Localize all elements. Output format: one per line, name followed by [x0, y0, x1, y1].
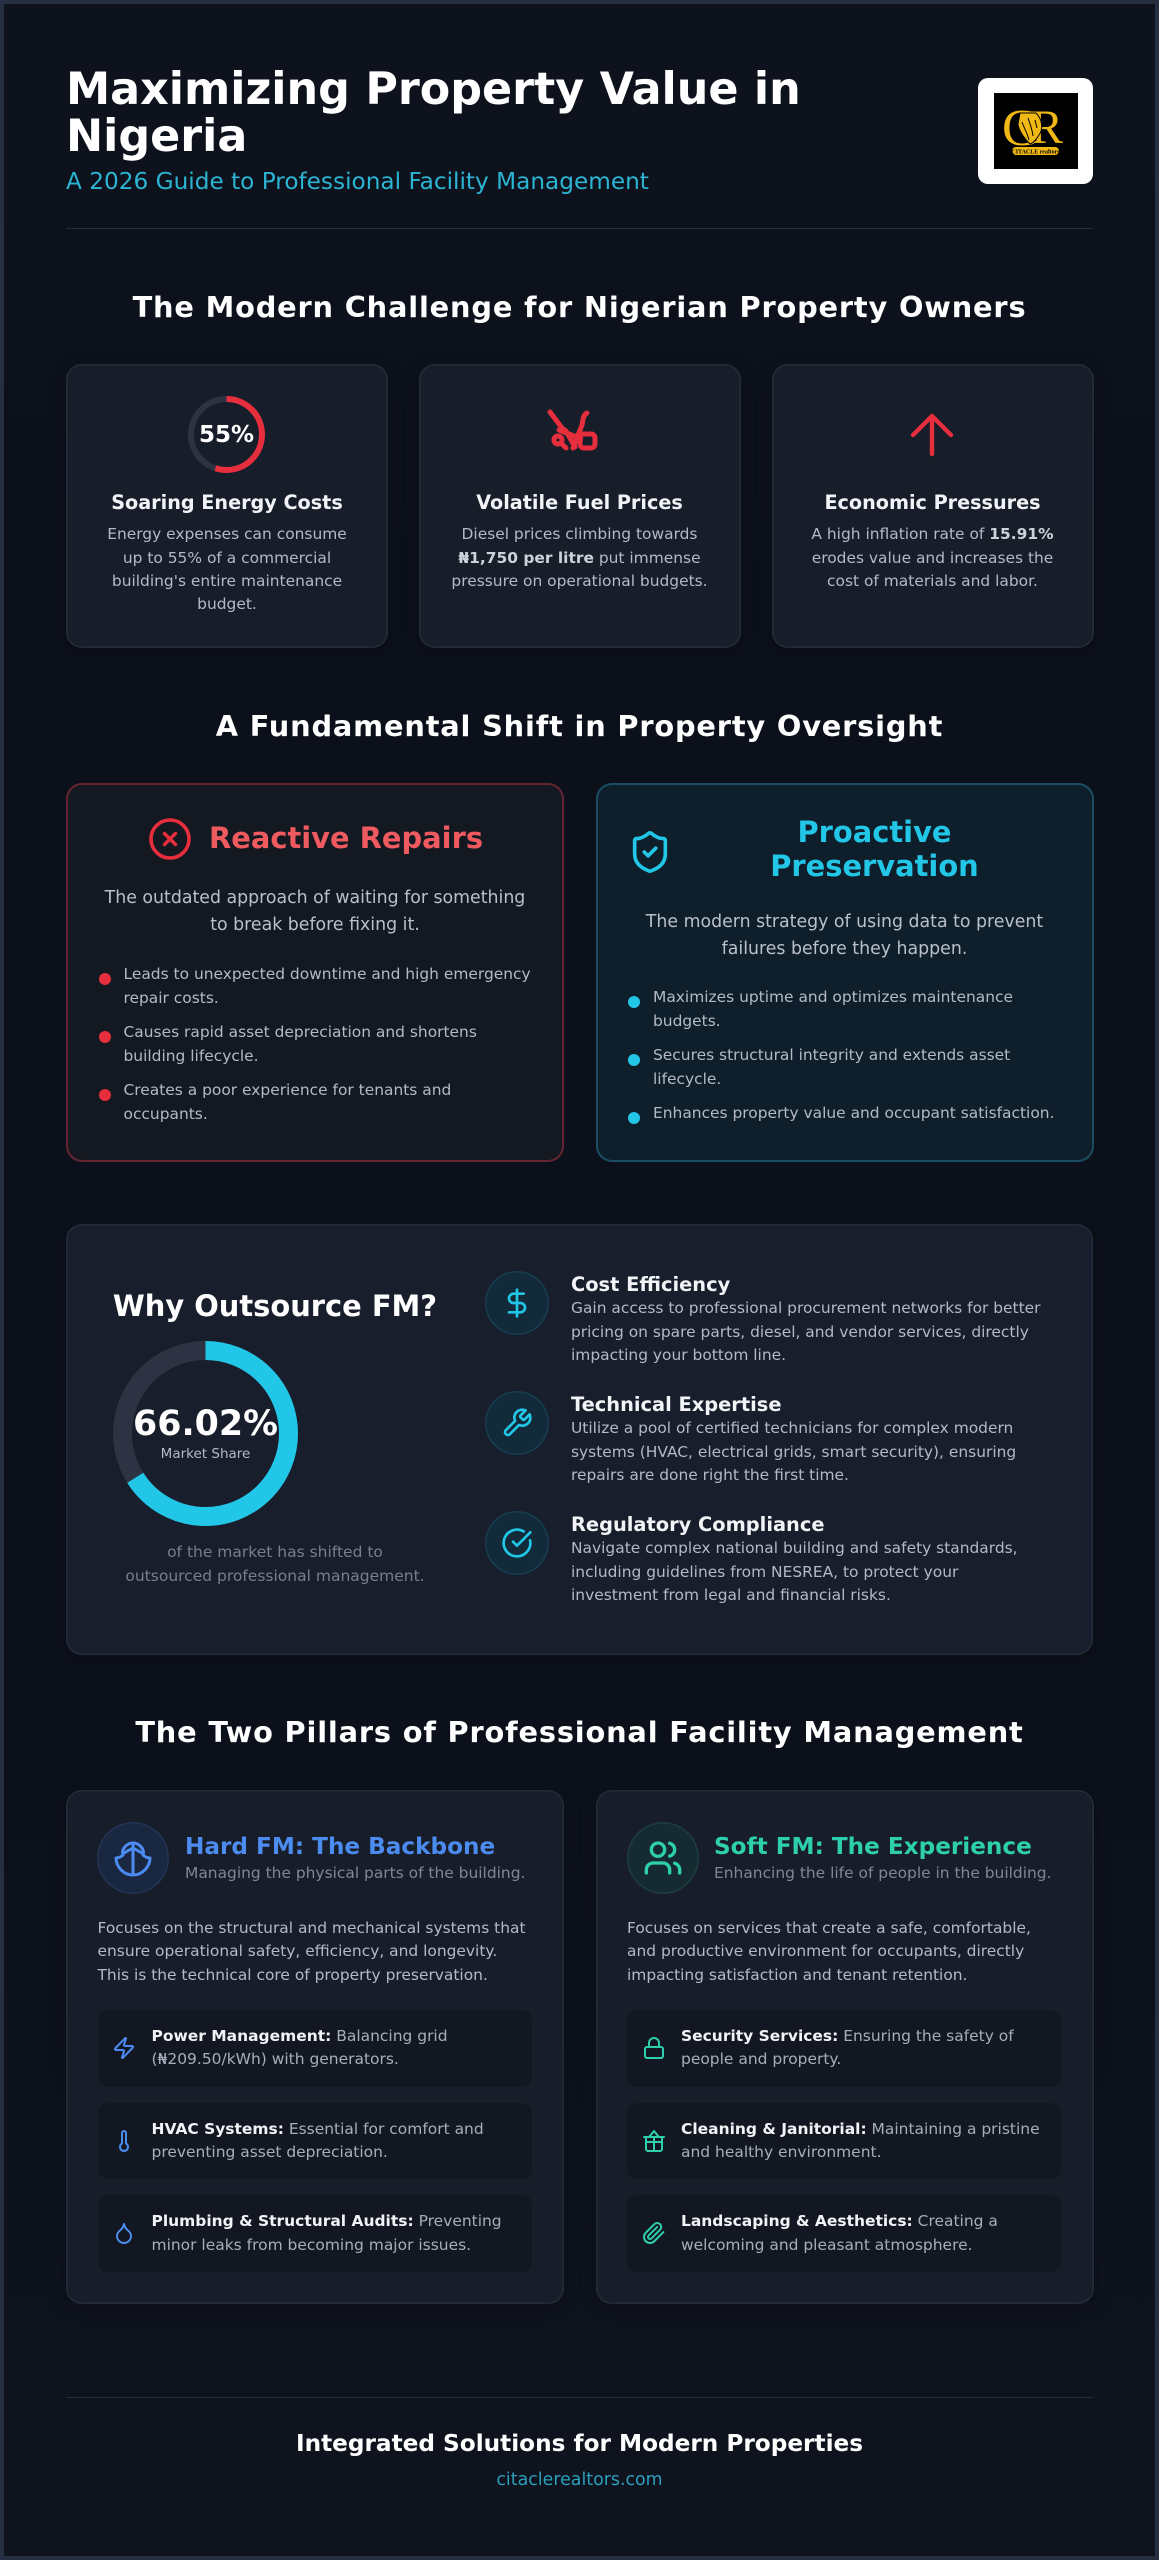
pillar text: impacting satisfaction and tenant retention.	[627, 1966, 967, 1984]
footer title: Integrated Solutions for Modern Properties	[296, 2430, 863, 2457]
pillar text	[97, 1919, 526, 1984]
chart: 66.02% donut	[113, 1341, 298, 1526]
card text	[811, 525, 1054, 590]
bullet list: Causes rapid asset depreciation and shortens	[124, 1023, 477, 1041]
donut caption: of the market has shifted to	[167, 1543, 383, 1561]
icon: shield check	[632, 831, 668, 873]
card text: cost of materials and labor.	[827, 572, 1038, 590]
pillar text: Focuses on services that create a safe, comfortable,	[627, 1919, 1031, 1937]
heading: fundamental shift: A Fundamental Shift in Property Oversight	[216, 709, 943, 743]
pillar text: This is the technical core of property preservation.	[98, 1966, 488, 1984]
card text: Diesel prices climbing towards	[462, 525, 697, 543]
pillar subtitle: Managing the physical parts of the building.	[185, 1864, 525, 1882]
panel: hard fm	[66, 1790, 564, 2304]
feature: technical expertise	[485, 1391, 1016, 1484]
item: landscaping and aesthetics: welcoming and pleasant atmosphere.	[681, 2236, 973, 2254]
footer divider	[66, 2397, 1093, 2398]
panel title: Why Outsource FM?	[113, 1289, 437, 1323]
panel: proactive preservation	[596, 783, 1094, 1162]
icon: x circle	[149, 818, 191, 860]
card title: Economic Pressures	[824, 491, 1041, 514]
icon: droplet	[116, 2223, 132, 2244]
feature: regulatory compliance: Regulatory Compliance	[571, 1513, 825, 1536]
card text: Energy expenses can consume	[107, 525, 347, 543]
item: plumbing and structural audits: Plumbing & Structural Audits: Preventing	[152, 2212, 502, 2230]
item: power management	[98, 2010, 532, 2086]
feature: technical expertise: Utilize a pool of certified technicians for complex modern	[571, 1419, 1013, 1437]
item: cleaning and janitorial	[627, 2103, 1061, 2179]
bullet list: budgets.	[653, 1012, 721, 1030]
card text: budget.	[197, 595, 257, 613]
icon: wrench	[485, 1391, 549, 1455]
bullet list: Leads to unexpected downtime and high emergency	[124, 965, 531, 983]
bullet list: lifecycle.	[653, 1070, 721, 1088]
feature: regulatory compliance: investment from legal and financial risks.	[571, 1586, 891, 1604]
card title: Soaring Energy Costs	[111, 491, 343, 514]
bullet list	[99, 965, 531, 1123]
panel intro: to break before fixing it.	[210, 915, 420, 935]
card text: ₦1,750 per litre put immense	[458, 549, 701, 567]
feature: cost efficiency: Gain access to professional procurement networks for better	[571, 1299, 1041, 1317]
item: security services	[627, 2010, 1061, 2086]
item: security services: people and property.	[681, 2050, 841, 2068]
pillar text: ensure operational safety, efficiency, and longevity.	[98, 1942, 497, 1960]
bullet list	[628, 988, 1054, 1124]
card text: pressure on operational budgets.	[451, 572, 708, 590]
icon: check circle	[485, 1511, 549, 1575]
panel: why outsource fm	[66, 1224, 1093, 1655]
feature: regulatory compliance: Navigate complex national building and safety standards,	[571, 1539, 1018, 1557]
icon: up arrow	[910, 414, 954, 456]
icon: fuel	[548, 410, 598, 450]
icon: hard fm circle	[97, 1822, 169, 1894]
item: hvac systems: HVAC Systems: Essential for comfort and	[152, 2120, 484, 2138]
bullet list: building lifecycle.	[124, 1047, 259, 1065]
icon: paperclip	[643, 2222, 664, 2244]
logo: CITACLE realtors	[1011, 150, 1060, 156]
panel intro	[104, 888, 525, 935]
bullet list: repair costs.	[124, 989, 219, 1007]
feature: regulatory compliance	[485, 1511, 1018, 1604]
panel title	[770, 815, 979, 883]
feature: cost efficiency: impacting your bottom line.	[571, 1346, 786, 1364]
item: cleaning and janitorial: and healthy environment.	[681, 2143, 882, 2161]
card title: Volatile Fuel Prices	[476, 491, 683, 514]
panel: economic pressures	[772, 364, 1094, 648]
icon: thermometer	[119, 2130, 129, 2152]
logo: C	[1002, 100, 1037, 157]
card text: up to 55% of a commercial	[123, 549, 331, 567]
bullet list: Secures structural integrity and extends asset	[653, 1046, 1010, 1064]
header divider	[66, 228, 1093, 229]
feature: regulatory compliance: including guidelines from NESREA, to protect your	[571, 1563, 958, 1581]
chart: 66.02% donut: 66.02%	[133, 1404, 278, 1444]
header title: Maximizing Property Value in	[66, 64, 801, 115]
icon: lightning	[114, 2037, 134, 2059]
logo: R	[1031, 101, 1063, 154]
panel title: Preservation	[770, 849, 979, 883]
item: plumbing and structural audits	[98, 2195, 532, 2272]
bullet list: Enhances property value and occupant satisfaction.	[653, 1104, 1054, 1122]
header title	[66, 64, 801, 162]
card text: A high inflation rate of 15.91%	[811, 525, 1054, 543]
logo	[978, 78, 1093, 184]
header subtitle: A 2026 Guide to Professional Facility Management	[66, 168, 649, 195]
card text: erodes value and increases the	[812, 549, 1053, 567]
icon: dollar	[485, 1271, 549, 1335]
heading: modern challenge: The Modern Challenge for Nigerian Property Owners	[133, 290, 1026, 324]
card text: building's entire maintenance	[112, 572, 342, 590]
panel title: Proactive	[797, 815, 952, 849]
panel title: Reactive Repairs	[209, 821, 483, 855]
item: power management: (₦209.50/kWh) with generators.	[152, 2050, 399, 2068]
panel intro: The outdated approach of waiting for something	[105, 888, 525, 908]
panel: volatile fuel prices	[418, 364, 740, 648]
card text	[107, 525, 347, 613]
chart: 55% ring	[188, 396, 265, 473]
item: plumbing and structural audits: minor leaks from becoming major issues.	[152, 2236, 471, 2254]
panel intro	[646, 912, 1043, 959]
item: cleaning and janitorial: Cleaning & Janitorial: Maintaining a pristine	[681, 2120, 1040, 2138]
header title: Nigeria	[66, 111, 247, 162]
pillar title: Hard FM: The Backbone	[185, 1834, 495, 1860]
item: landscaping and aesthetics	[627, 2195, 1061, 2272]
panel: soaring energy costs	[66, 364, 388, 648]
item: security services: Security Services: Ensuring the safety of	[681, 2027, 1014, 2045]
panel: soft fm	[596, 1790, 1094, 2304]
icon: people circle	[626, 1822, 698, 1894]
feature: cost efficiency: pricing on spare parts, diesel, and vendor services, directly	[571, 1323, 1029, 1341]
chart: 66.02% donut: Market Share	[161, 1446, 250, 1462]
heading: two pillars: The Two Pillars of Professional Facility Management	[135, 1715, 1024, 1749]
feature: technical expertise: systems (HVAC, electrical grids, smart security), ensuring	[571, 1443, 1016, 1461]
icon: gift basket	[643, 2130, 665, 2152]
feature: cost efficiency	[485, 1271, 1041, 1364]
feature: technical expertise: Technical Expertise	[571, 1393, 781, 1416]
item: landscaping and aesthetics: Landscaping & Aesthetics: Creating a	[681, 2212, 998, 2230]
panel intro: failures before they happen.	[722, 939, 967, 959]
card text	[451, 525, 708, 590]
bullet list: Maximizes uptime and optimizes maintenance	[653, 988, 1013, 1006]
footer link: citaclerealtors.com	[496, 2470, 663, 2490]
panel intro: The modern strategy of using data to prevent	[646, 912, 1043, 932]
pillar text: Focuses on the structural and mechanical systems that	[98, 1919, 526, 1937]
item: power management: Power Management: Balancing grid	[152, 2027, 448, 2045]
chart: 55% ring: 55%	[199, 422, 254, 448]
pillar text: and productive environment for occupants, directly	[627, 1942, 1024, 1960]
donut caption	[125, 1543, 425, 1585]
item: hvac systems	[98, 2103, 532, 2179]
item: hvac systems: preventing asset depreciation.	[152, 2143, 388, 2161]
icon: lock	[644, 2037, 664, 2059]
pillar text	[627, 1919, 1031, 1984]
pillar subtitle: Enhancing the life of people in the building.	[714, 1864, 1051, 1882]
bullet list: Creates a poor experience for tenants and	[124, 1081, 451, 1099]
panel: reactive repairs: occupants.	[124, 1105, 208, 1123]
panel: reactive repairs	[66, 783, 564, 1162]
donut caption: outsourced professional management.	[125, 1567, 425, 1585]
feature: cost efficiency: Cost Efficiency	[571, 1273, 730, 1296]
feature: technical expertise: repairs are done right the first time.	[571, 1466, 849, 1484]
pillar title: Soft FM: The Experience	[714, 1834, 1032, 1860]
